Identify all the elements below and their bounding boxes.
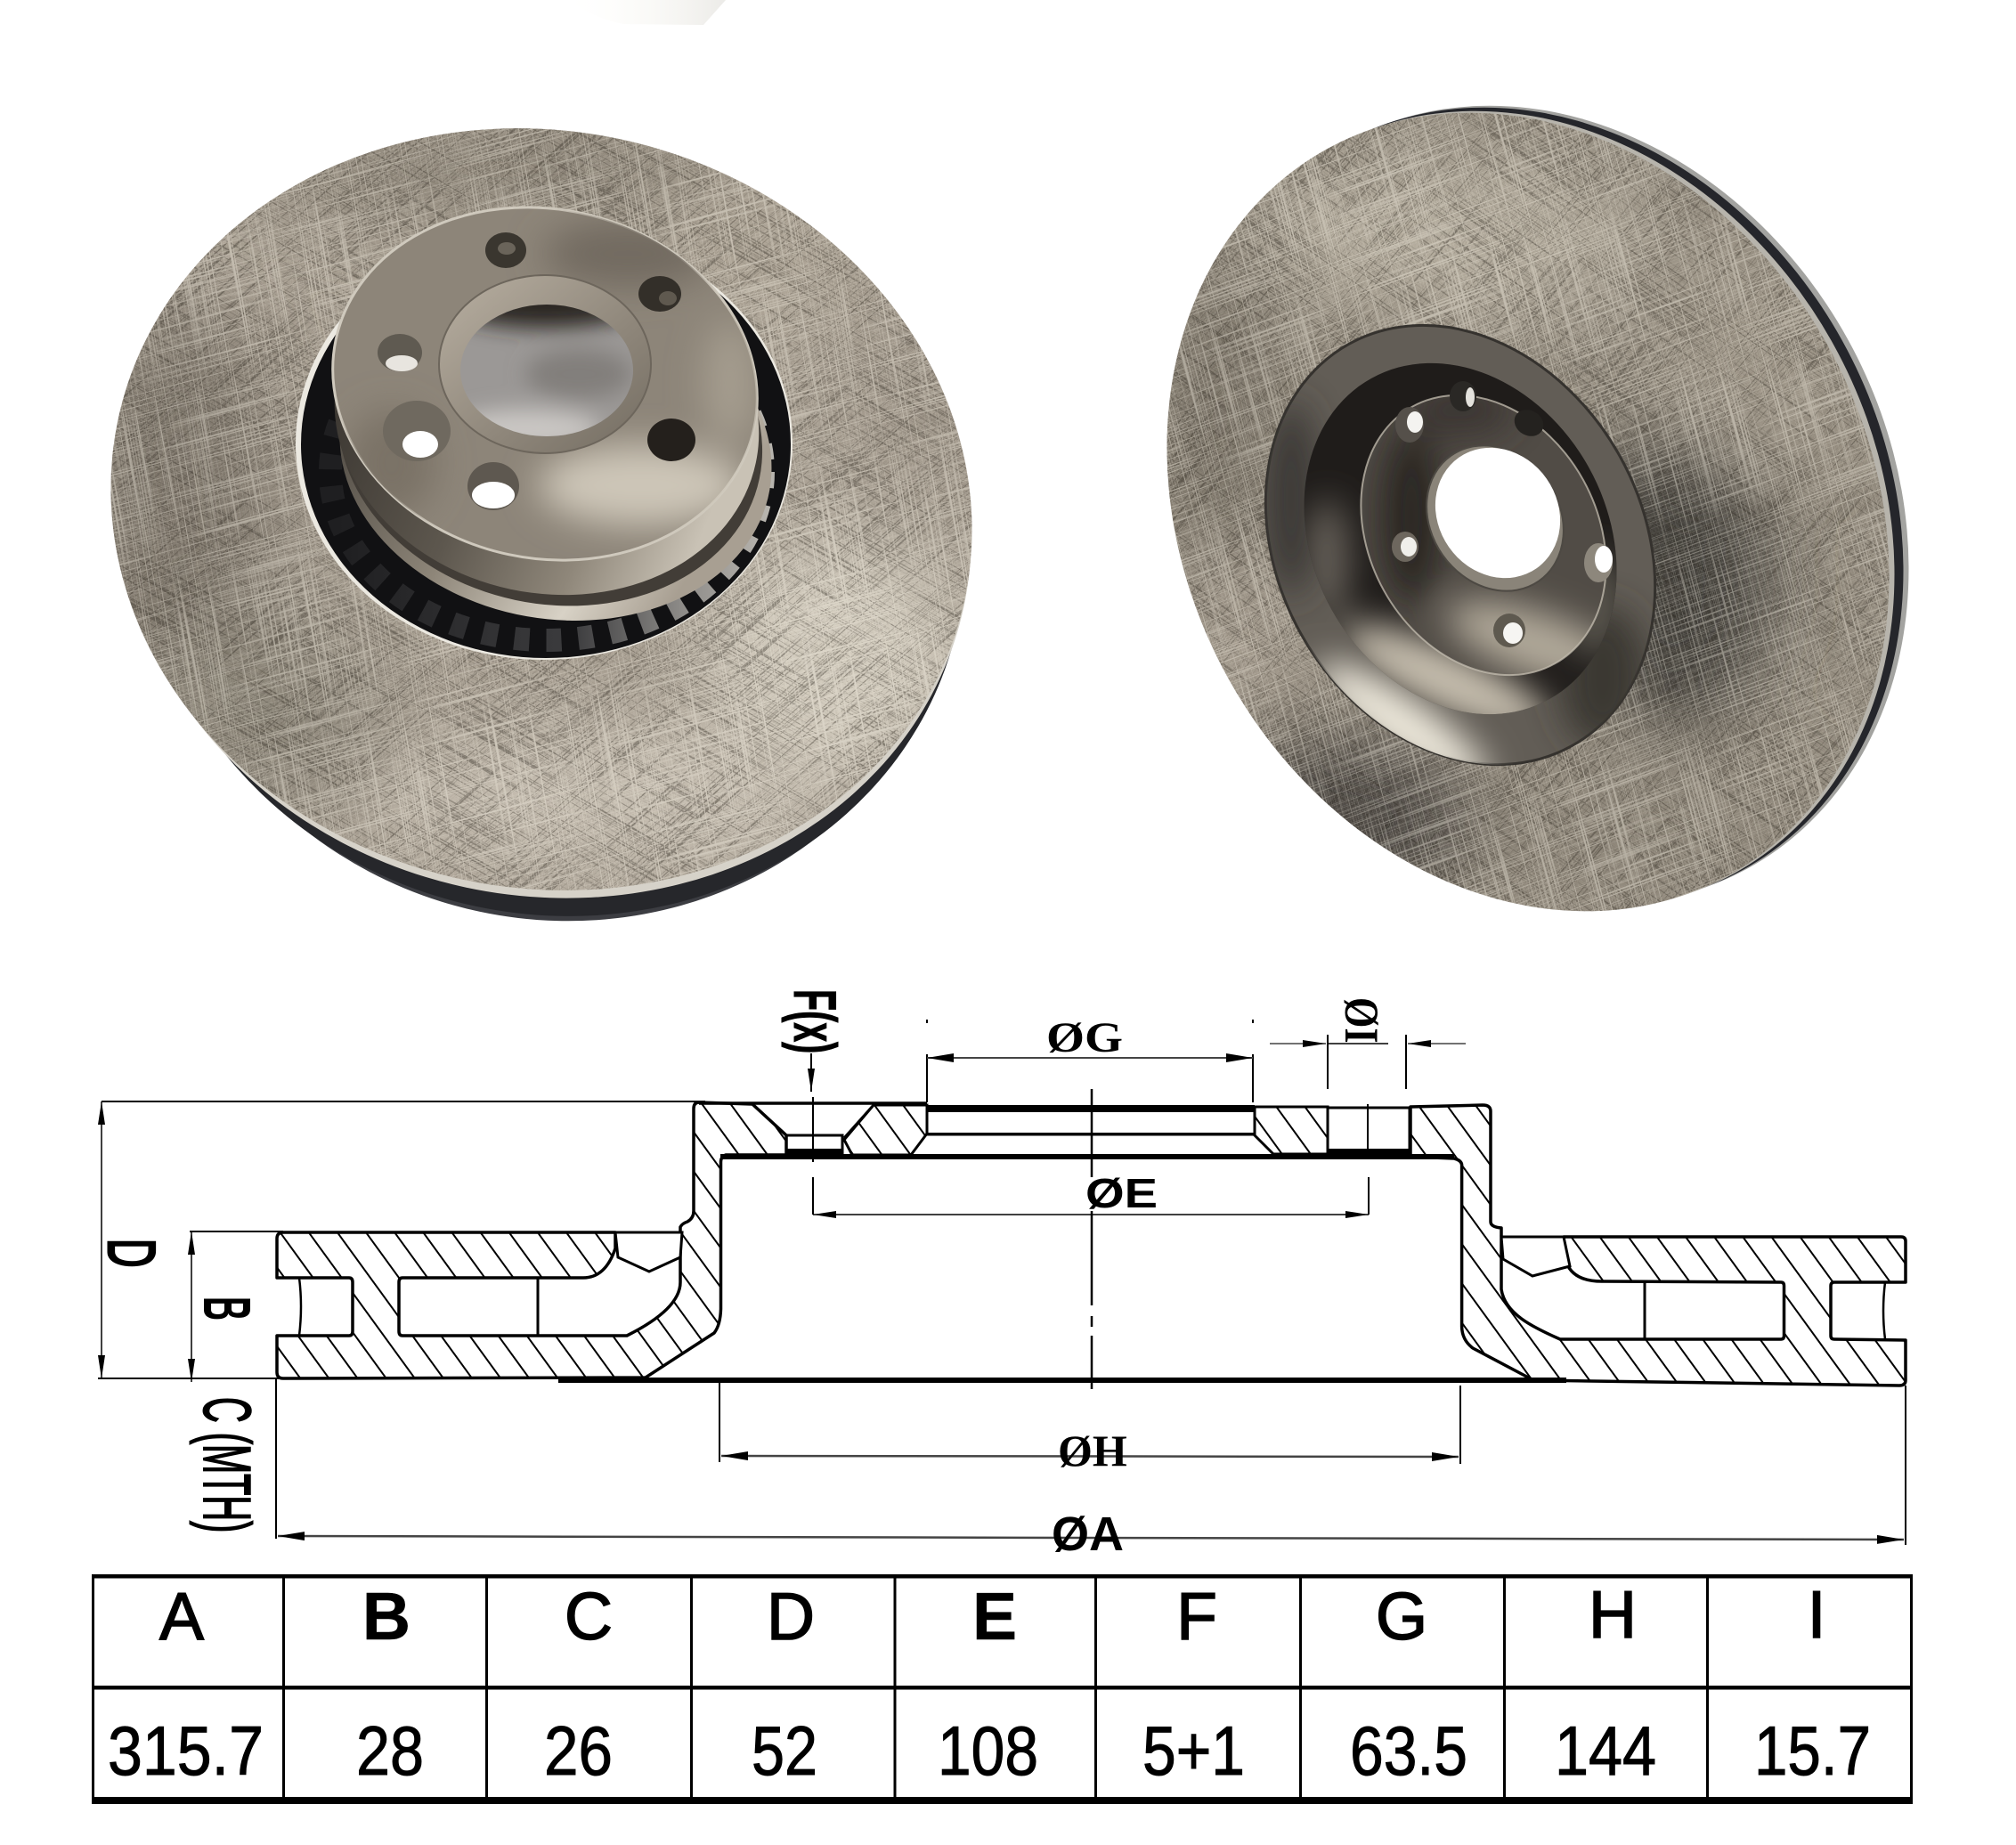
bolt hole 3: [647, 419, 695, 461]
left disc pocket: [615, 1232, 682, 1272]
hub inner thick line: [720, 1154, 1454, 1159]
centre line: [1091, 1089, 1093, 1389]
rear bolt hole 3: [1509, 404, 1549, 442]
bolt centre lines: [813, 1097, 1368, 1162]
table header letters: D: [767, 1579, 815, 1654]
table values: 144: [1555, 1711, 1656, 1790]
table values: 15.7: [1754, 1711, 1871, 1790]
hub centre ring: [439, 275, 651, 453]
vent band: [1041, 0, 2016, 1036]
hub flange: [313, 250, 799, 654]
dimension ØE: [813, 1170, 1369, 1216]
table values: 315.7: [108, 1711, 264, 1790]
table values: 26: [544, 1711, 613, 1790]
right hub piece: [1255, 1107, 1328, 1154]
dimension ØA: [276, 1378, 1906, 1561]
table header letters: B: [362, 1579, 411, 1654]
table header letters: E: [972, 1579, 1017, 1654]
table values: 63.5: [1350, 1711, 1467, 1790]
rear bolt hole 4: [1392, 532, 1419, 562]
rear bolt hole 5: [1584, 543, 1613, 582]
table values: 52: [752, 1711, 817, 1790]
dimension D: D: [93, 1239, 168, 1267]
bolt hole 4: [467, 462, 519, 510]
bolt hole 2: [638, 276, 681, 312]
dimension ØG: ØG: [1046, 1014, 1123, 1061]
table header letters: A: [159, 1579, 204, 1654]
disc base thick line: [558, 1378, 1566, 1383]
recess bright rim: [296, 227, 793, 660]
left section body: [277, 1102, 786, 1378]
bolt hole 6: [378, 334, 422, 371]
rear plate edge: [1046, 0, 2016, 1034]
photo: brake disc rear view: [1167, 105, 1909, 912]
bolt hole 1: [485, 232, 526, 268]
hub floor: [1360, 394, 1606, 677]
hub outer annulus: [1264, 324, 1656, 766]
top edge artefact: [570, 0, 726, 25]
table header letters: H: [1589, 1577, 1637, 1652]
hub cylinder wall: [301, 203, 793, 634]
hub groove: [306, 224, 794, 645]
tone ring teeth: [330, 304, 763, 640]
left bolt hole floor: [786, 1149, 842, 1155]
hub recess line: [927, 1133, 1255, 1136]
table values: 108: [938, 1711, 1038, 1790]
dimension F(x): [781, 989, 849, 1092]
right bolt hole: [1328, 1108, 1410, 1152]
dimension F(x): F(x): [781, 989, 849, 1053]
hub top edge line: [699, 1101, 927, 1105]
technical cross-section drawing: [93, 989, 1906, 1561]
hub centre bore: [460, 305, 633, 436]
table header letters: F: [1176, 1579, 1217, 1654]
table values: 28: [356, 1711, 424, 1790]
bore ring: [1399, 419, 1591, 618]
dimension ØI: [1270, 997, 1466, 1089]
left hub piece: [844, 1105, 927, 1155]
table values: 5+1: [1142, 1711, 1245, 1790]
table grid: [92, 1574, 1913, 1804]
table header letters: [159, 1577, 1825, 1654]
right section body: [1410, 1105, 1906, 1386]
table header letters: C: [565, 1579, 613, 1654]
rear bolt hole 1: [1450, 381, 1476, 411]
hub recess wall: [1304, 363, 1617, 714]
disc vent band: [71, 84, 1036, 992]
bolt hole 5: [383, 401, 451, 461]
left outer vent line: [299, 1278, 301, 1336]
dimension C (MTH): C (MTH): [190, 1397, 264, 1532]
table header letters: I: [1808, 1577, 1825, 1652]
dimension ØA: ØA: [1052, 1508, 1124, 1561]
table values: [108, 1711, 1871, 1790]
friction face: [1167, 112, 1890, 912]
disc underside plate: [87, 95, 1028, 995]
right disc pocket: [1501, 1237, 1570, 1276]
right bolt hole floor: [1328, 1149, 1410, 1155]
photo: brake disc front view: [110, 128, 972, 921]
left bolt hole: [752, 1104, 874, 1153]
dimension ØI: ØI: [1335, 997, 1388, 1044]
hub top face: [331, 206, 759, 562]
specification table: [92, 1574, 1913, 1804]
right outer vent line: [1883, 1282, 1885, 1339]
right vent divider: [1644, 1282, 1646, 1339]
disc light side band: [47, 58, 1043, 977]
dimension B: B: [190, 1296, 264, 1321]
rear bolt hole 6: [1493, 614, 1525, 647]
disc friction face: [110, 128, 972, 890]
hub top thick line: [927, 1105, 1255, 1112]
dimension ØG: [927, 1014, 1253, 1102]
tone ring recess: [301, 231, 791, 658]
left vent divider: [536, 1278, 540, 1336]
centre bore: [1410, 423, 1585, 603]
side band: [1032, 0, 2016, 1039]
dimension ØH: [719, 1382, 1460, 1475]
dimension ØE: ØE: [1085, 1170, 1158, 1216]
dimension ØH: ØH: [1058, 1426, 1127, 1475]
rear bolt hole 2: [1395, 407, 1424, 443]
table header letters: G: [1376, 1579, 1427, 1654]
